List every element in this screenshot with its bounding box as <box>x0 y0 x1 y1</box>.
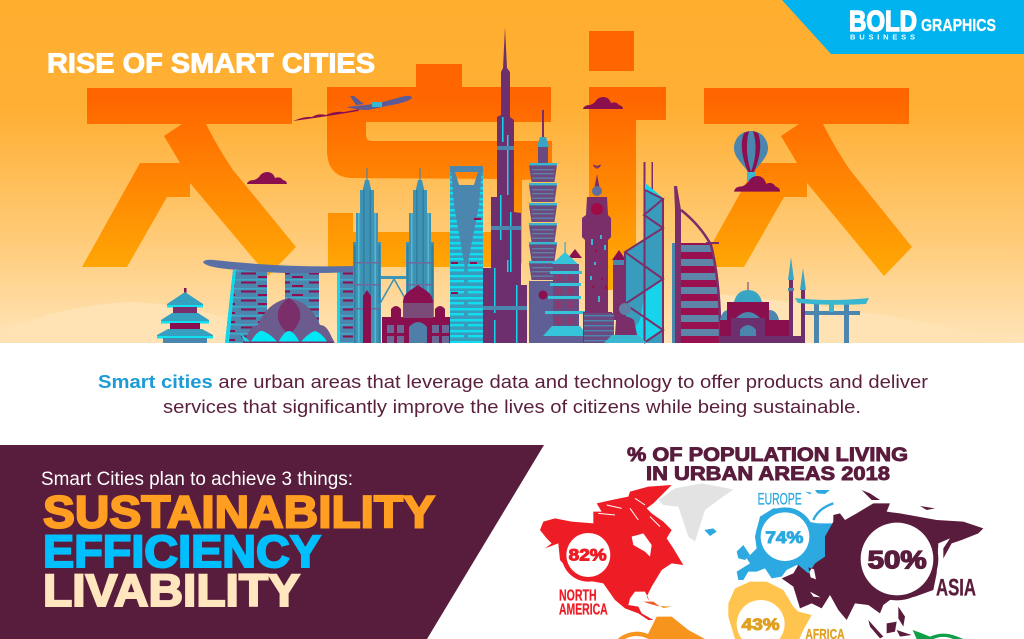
background hills <box>0 292 1012 343</box>
landmark: burj al arab <box>672 186 720 343</box>
landmark: torii gate <box>795 298 869 343</box>
marker: north america 82% <box>562 528 615 582</box>
marker: south america <box>618 632 656 639</box>
region: oceania <box>913 630 963 639</box>
landmark: clock tower <box>582 165 612 343</box>
landmark: burj khalifa <box>483 27 527 343</box>
world map <box>538 483 983 639</box>
label: asia: ASIA <box>936 575 976 602</box>
landmark: pagoda <box>543 242 588 343</box>
title: RISE OF SMART CITIES <box>47 48 375 78</box>
logo badge: BOLD <box>849 6 917 38</box>
logo badge <box>782 0 1024 54</box>
glyph: fourth character <box>699 88 912 276</box>
large orange glyphs <box>82 31 912 290</box>
logo badge: BUSINESS <box>850 32 915 42</box>
icon: hot air balloon <box>734 131 768 181</box>
label: north america <box>559 588 608 619</box>
landmark: buddha statue <box>604 303 647 343</box>
landmark: taj mahal <box>363 285 467 343</box>
landmark: bank of china tower <box>625 162 663 343</box>
glyph: first character <box>82 88 296 276</box>
region: south america <box>645 617 705 639</box>
marker: europe 74% <box>756 507 814 566</box>
landmark: low podium <box>584 313 614 343</box>
landmark: hagia sophia with minarets <box>720 257 806 343</box>
marker: africa 43%: 43% <box>742 615 780 634</box>
region: asia <box>782 490 983 638</box>
icon: cloud left <box>247 172 287 184</box>
icon: cloud under balloon <box>734 176 780 192</box>
intro text: services that significantly improve the lives of citizens while being sustainable. <box>163 396 861 417</box>
intro text <box>98 371 928 417</box>
icon: airplane with trail <box>293 96 412 121</box>
landmark: lotus building <box>240 298 335 343</box>
landmark: small tower <box>612 250 626 320</box>
marker: europe 74%: 74% <box>765 528 804 547</box>
label: north america: NORTH <box>559 588 597 605</box>
marker: asia 50%: 50% <box>868 547 927 574</box>
landmark: taipei 101 <box>529 110 557 343</box>
goal: livability: LIVABILITY <box>43 565 300 616</box>
region: north america <box>538 485 683 620</box>
panel: three goals <box>0 445 544 639</box>
marker: africa 43% <box>737 600 785 639</box>
intro text: Smart cities are urban areas that leverage data and technology to offer products and deliver <box>98 371 928 392</box>
goal: efficiency: EFFICIENCY <box>43 526 321 577</box>
skyline <box>157 27 869 343</box>
label: north america: AMERICA <box>559 602 608 619</box>
glyph: second character <box>327 64 552 267</box>
landmark: shanghai world financial center <box>450 166 483 343</box>
landmark: petronas towers <box>353 168 434 343</box>
region: greenland <box>658 483 733 542</box>
landmark: temple of heaven <box>157 288 213 343</box>
map heading <box>627 444 908 485</box>
region: europe <box>704 490 833 580</box>
icon: cloud centre <box>583 97 623 109</box>
map heading: IN URBAN AREAS 2018 <box>646 463 890 485</box>
label: europe: EUROPE <box>758 490 802 509</box>
panel subtitle: Smart Cities plan to achieve 3 things: <box>41 468 353 490</box>
map heading: % OF POPULATION LIVING <box>627 444 908 466</box>
landmark: marina bay sands <box>203 260 354 343</box>
goal: sustainability: SUSTAINABILITY <box>43 486 435 538</box>
hero background <box>0 0 1024 343</box>
glyph: third character <box>589 31 666 290</box>
marker: north america 82%: 82% <box>569 545 607 564</box>
marker: asia 50% <box>856 518 938 600</box>
logo badge: GRAPHICS <box>921 15 996 35</box>
region: africa <box>728 582 812 639</box>
